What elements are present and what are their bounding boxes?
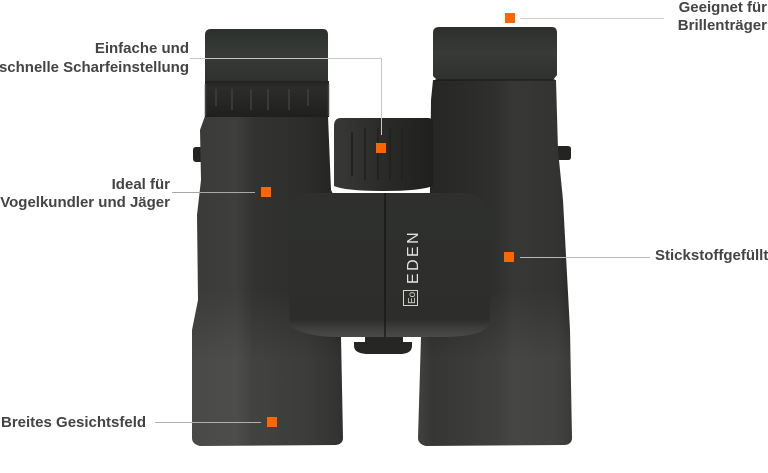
marker: nitrogen	[504, 252, 514, 262]
focus wheel	[334, 118, 433, 191]
label: Ideal für Vogelkundler und Jäger: Ideal für	[112, 176, 170, 193]
leader line: Breites Gesichtsfeld	[155, 422, 261, 424]
label: Stickstoffgefüllt: Stickstoffgefüllt	[655, 247, 768, 264]
marker: birdwatchers	[261, 187, 271, 197]
bridge	[288, 193, 490, 337]
marker: focus	[376, 143, 386, 153]
marker: field of view	[267, 417, 277, 427]
label: Einfache und schnelle Scharfeinstellung: schnelle Scharfeinstellung	[0, 59, 189, 76]
leader line: Ideal für Vogelkundler und Jäger	[172, 192, 255, 194]
label: Einfache und schnelle Scharfeinstellung: Einfache und	[95, 40, 189, 57]
left barrel	[190, 110, 346, 450]
EDEN logo: Eo	[407, 291, 418, 304]
center hinge line	[384, 193, 386, 337]
right lug	[545, 146, 571, 160]
center knob	[354, 335, 412, 354]
leader line: Einfache und schnelle Scharfeinstellung	[190, 58, 382, 135]
leader line: Geeignet für Brillenträger	[520, 18, 664, 20]
right eyecup	[433, 27, 557, 80]
leader line: Stickstoffgefüllt	[520, 256, 650, 258]
left focus ring	[205, 81, 329, 117]
left lug	[193, 147, 212, 162]
label: Ideal für Vogelkundler und Jäger: Vogelkundler und Jäger	[0, 194, 170, 211]
binoculars	[190, 27, 574, 450]
right barrel	[416, 78, 574, 450]
label: Geeignet für Brillenträger: Brillenträger	[678, 17, 767, 34]
marker: eyeglasses	[505, 13, 515, 23]
left eyecup	[205, 29, 328, 81]
EDEN logo	[404, 230, 422, 306]
EDEN logo: EDEN	[405, 230, 422, 284]
label: Breites Gesichtsfeld: Breites Gesichtsfeld	[1, 414, 146, 431]
